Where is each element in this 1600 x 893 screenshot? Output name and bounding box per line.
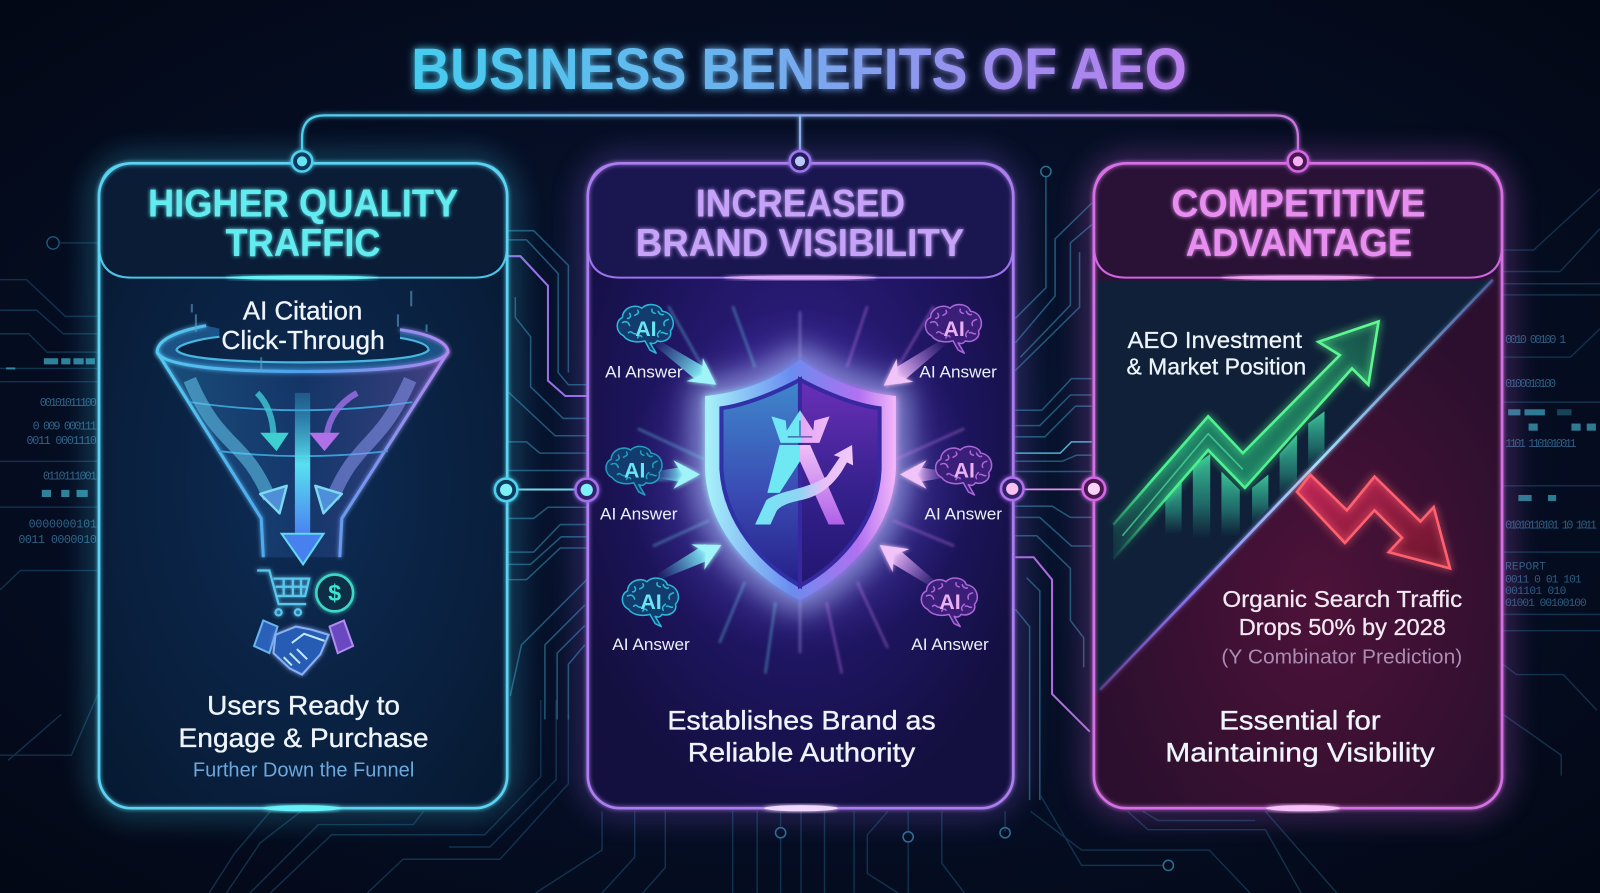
binary data right	[1505, 333, 1597, 610]
shield icon	[705, 359, 896, 600]
brains with AI labels: AI	[939, 590, 961, 614]
red decline arrow	[1297, 475, 1450, 568]
brains with AI labels: AI	[943, 317, 965, 341]
binary data right: 001101 010	[1505, 586, 1567, 598]
text: organic search	[1221, 586, 1463, 668]
brains with AI labels: AI	[624, 459, 645, 483]
heading: COMPETITIVE	[1171, 182, 1426, 225]
AI answer labels: AI Answer	[600, 504, 678, 523]
binary data right: 0100010100	[1505, 377, 1556, 391]
purple trace right gutter	[1015, 557, 1090, 732]
icon: handshake	[254, 620, 353, 675]
icon: shopping cart	[257, 570, 309, 615]
brains with AI labels: AI	[640, 590, 662, 614]
crown and A logo	[755, 410, 853, 525]
text: AI citation click-through	[221, 297, 385, 355]
brains with AI labels: AI	[635, 317, 657, 341]
title: BUSINESS BENEFITS OF AEO	[411, 37, 1187, 102]
text: AI citation click-through: Click-Through	[221, 327, 385, 355]
light burst	[627, 306, 973, 674]
binary data left: 0 009 000111	[33, 420, 97, 434]
purple trace left gutter	[508, 256, 587, 396]
brains with AI labels	[606, 305, 992, 627]
binary data left: 0011 0001110	[27, 434, 97, 448]
gutter circuits: left gutter	[508, 231, 587, 719]
binary data left: 0011 0000010	[18, 533, 97, 547]
panel: competitive advantage	[1094, 163, 1502, 816]
text: essential: Essential for	[1219, 706, 1381, 736]
heading: BRAND VISIBILITY	[636, 222, 964, 265]
text: establishes brand: Establishes Brand as	[667, 706, 936, 736]
beam arrows	[645, 329, 954, 599]
text: organic search: Drops 50% by 2028	[1239, 614, 1446, 640]
brains with AI labels: AI	[954, 459, 975, 483]
binary data left: 00101011100	[40, 396, 97, 410]
AI answer labels: AI Answer	[612, 635, 690, 654]
icon: dollar coin	[316, 575, 353, 611]
text: users ready	[179, 690, 429, 782]
funnel icon	[157, 291, 448, 564]
connector nodes	[292, 151, 1308, 501]
green growth arrow and bars	[1113, 322, 1379, 559]
text: organic search: (Y Combinator Prediction)	[1221, 646, 1462, 668]
binary data left	[18, 396, 97, 547]
text: AEO investment: AEO Investment	[1128, 327, 1303, 353]
background circuitry	[0, 189, 1600, 893]
text: essential: Maintaining Visibility	[1165, 737, 1436, 767]
panel: increased brand visibility	[588, 163, 1013, 811]
AI answer labels: AI Answer	[605, 363, 683, 382]
AI answer labels: AI Answer	[924, 504, 1002, 523]
heading	[636, 182, 964, 265]
heading: ADVANTAGE	[1186, 222, 1412, 265]
binary data right: 01001 00100100	[1505, 598, 1587, 610]
heading: INCREASED	[696, 182, 905, 225]
text: users ready: Users Ready to	[207, 690, 400, 720]
binary data right: 0010 00100 1	[1505, 333, 1566, 347]
AI answer labels	[600, 363, 1002, 654]
AI answer labels: AI Answer	[919, 363, 997, 382]
top connector bracket	[302, 115, 1298, 161]
AI answer labels: AI Answer	[911, 635, 989, 654]
heading: TRAFFIC	[226, 222, 381, 265]
diagonal divider	[1100, 280, 1493, 690]
binary data left: 0000000101	[29, 518, 97, 532]
text: users ready: Engage & Purchase	[179, 723, 429, 753]
data blocks left	[6, 358, 95, 497]
binary data right: REPORT	[1505, 561, 1546, 573]
text: organic search: Organic Search Traffic	[1222, 586, 1463, 612]
connector: horizontal links	[507, 489, 1094, 490]
heading	[148, 182, 458, 265]
text: establishes brand	[667, 706, 936, 767]
heading	[1171, 182, 1426, 265]
binary data right: 1101 1101010011	[1505, 437, 1577, 451]
text: users ready: Further Down the Funnel	[193, 760, 414, 782]
text: essential	[1165, 706, 1436, 767]
gutter circuits: right gutter	[1015, 166, 1092, 800]
data blocks right	[1508, 409, 1596, 501]
text: AEO investment	[1127, 327, 1306, 380]
binary data left: 0110111001	[43, 470, 97, 484]
icon: dollar coin: $	[328, 580, 341, 606]
panel: higher quality traffic	[99, 163, 507, 811]
text: AI citation click-through: AI Citation	[243, 297, 362, 325]
text: AEO investment: & Market Position	[1127, 354, 1306, 380]
binary data right: 0011 0 01 101	[1505, 575, 1582, 587]
heading: HIGHER QUALITY	[148, 182, 458, 225]
binary data right: 01010110101 10 1011	[1505, 519, 1597, 533]
text: establishes brand: Reliable Authority	[688, 737, 916, 767]
